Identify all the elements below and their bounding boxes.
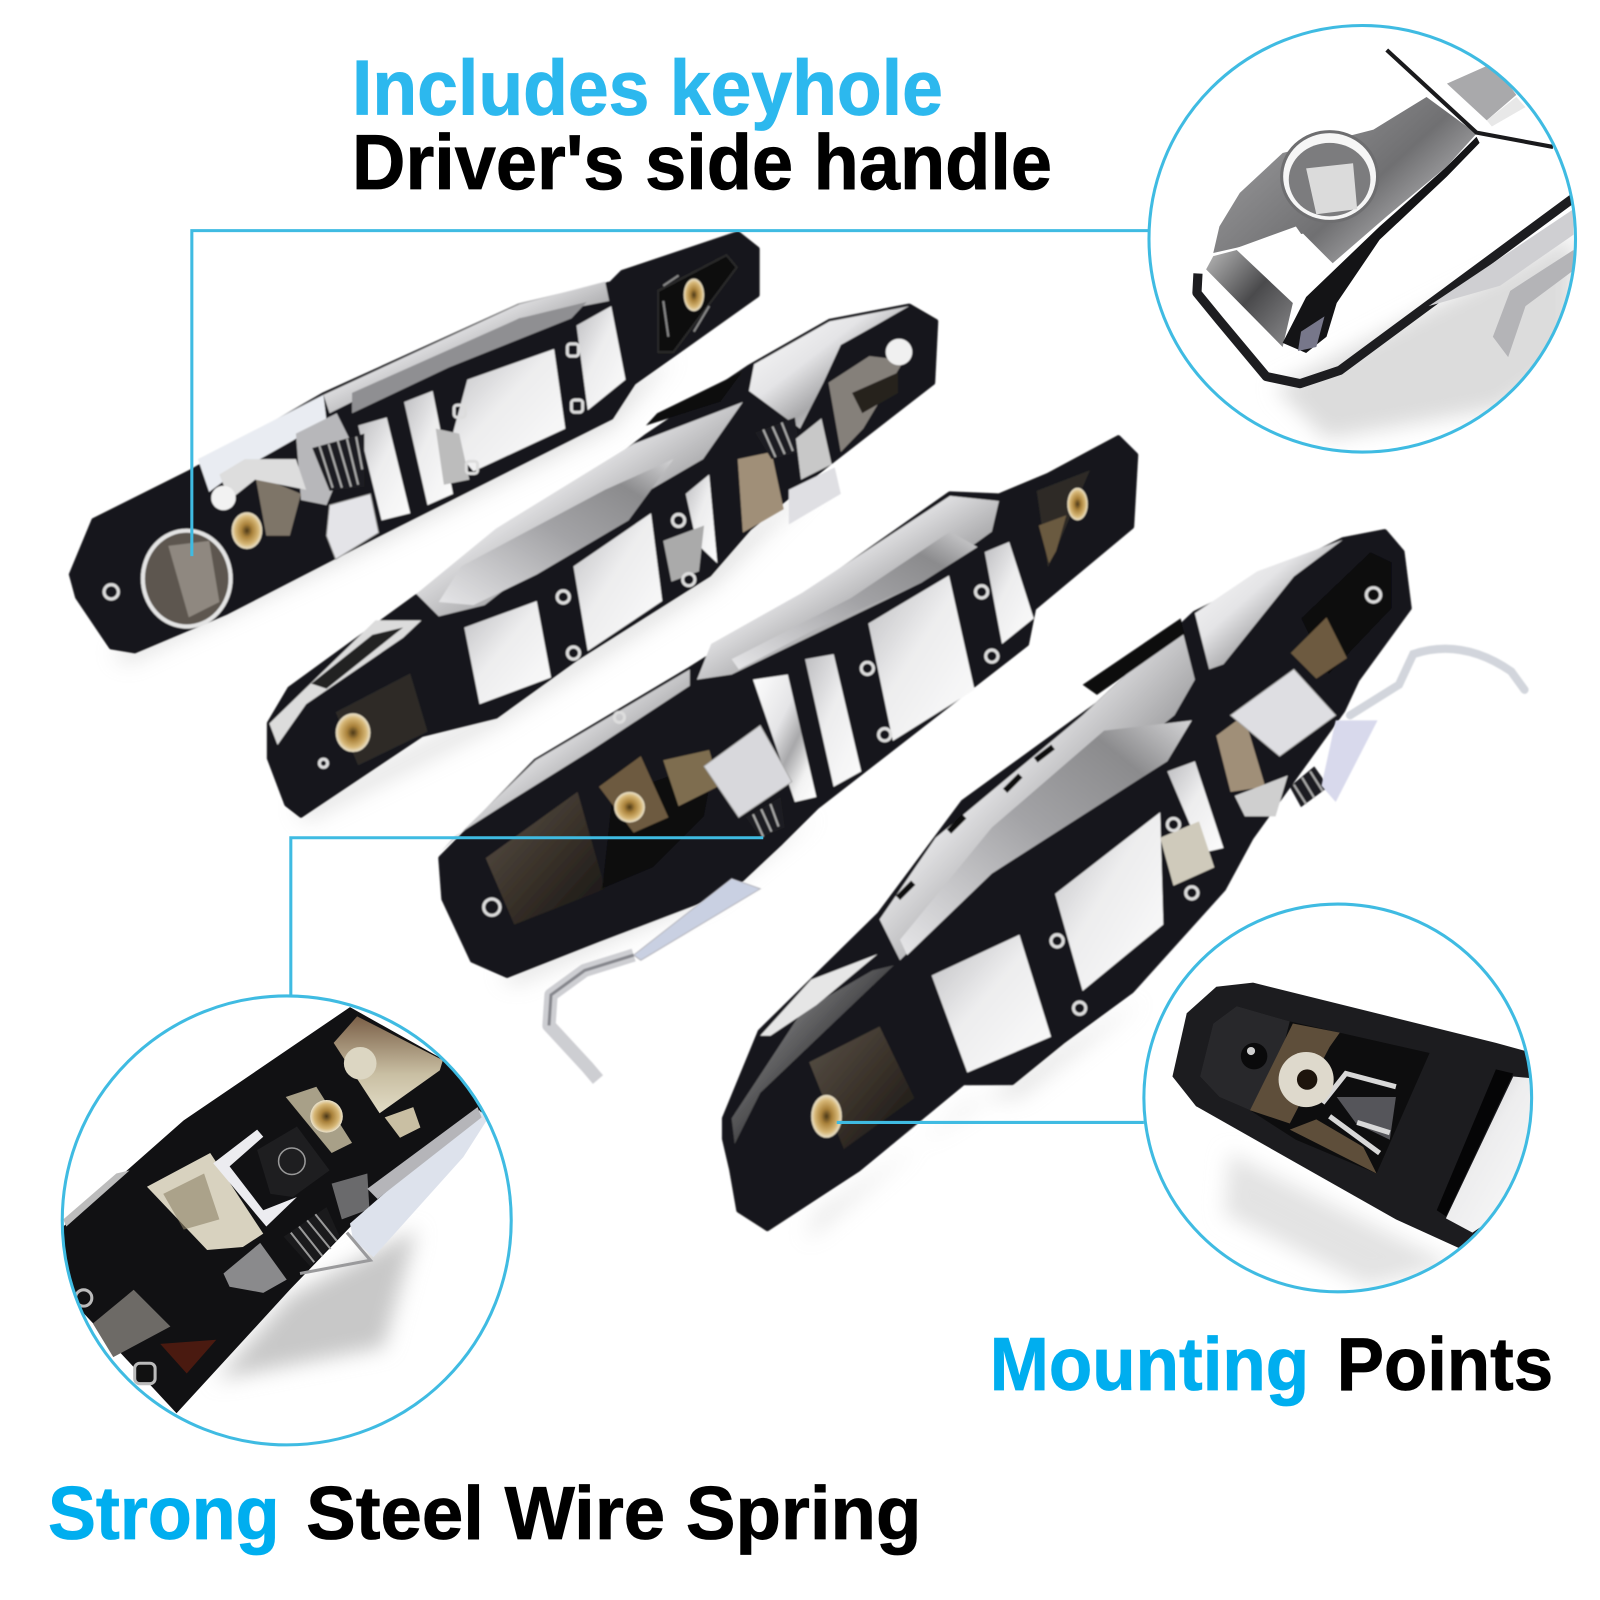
connector: keyhole callout	[192, 231, 1149, 556]
handle 4	[724, 532, 1409, 1240]
handle 2	[269, 306, 936, 821]
connector: spring callout	[291, 838, 763, 996]
label: strong: Strong	[48, 1472, 280, 1556]
handle 4 lever arm	[1321, 649, 1524, 802]
handle 1: driver's side with keyhole	[71, 234, 757, 663]
heading: includes keyhole: Includes keyhole	[352, 45, 943, 131]
heading: driver's side handle: Driver's side handle	[352, 120, 1052, 206]
label: steel wire spring: Steel Wire Spring	[306, 1472, 921, 1556]
callout circle: spring detail	[53, 996, 511, 1445]
callout circle: keyhole detail	[1149, 26, 1576, 452]
handle 3 lever arm	[549, 879, 760, 1080]
label: mounting: Mounting	[990, 1323, 1309, 1407]
handle 3	[441, 438, 1136, 985]
label: points: Points	[1337, 1323, 1553, 1407]
connector: mounting point callout	[837, 1121, 1144, 1124]
callout circle: mounting points detail	[1144, 904, 1536, 1292]
